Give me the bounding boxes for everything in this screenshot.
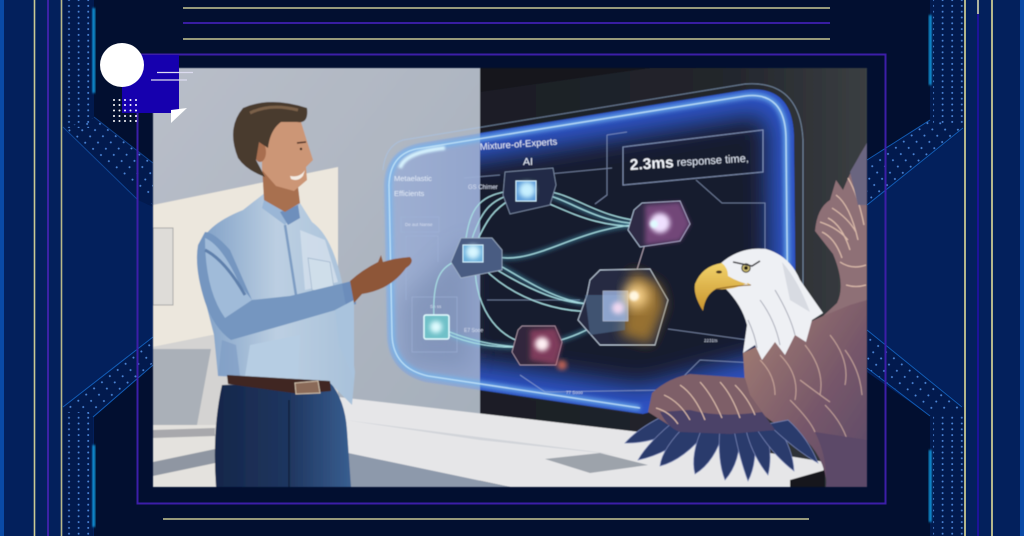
tablet [545,453,648,473]
white circle [100,43,144,87]
blue square [122,55,179,113]
wing coverts [648,373,761,426]
eye [733,261,760,272]
white triangle [171,108,187,123]
photo scene [153,68,868,487]
trousers [215,382,351,487]
label: response time: 2.3ms [629,154,674,174]
flow wires [434,190,650,347]
label: small notes [405,185,718,395]
label: small notes: 77 Sooo [566,390,583,395]
white neck and head [720,249,823,360]
beak [695,263,751,311]
label: response time: response time, [676,153,749,169]
man [197,102,412,487]
hand [350,255,412,303]
label: small notes: Sn ss [430,304,442,309]
label: small notes: 2231ts [704,338,718,343]
node: prism B [578,269,668,345]
lower wing [625,374,818,481]
label: mixture of experts: Mixture-of-Experts [479,137,558,153]
laptop [153,349,211,425]
label: small notes: De aut Nanse [405,222,433,227]
body [743,300,867,487]
face [262,112,313,191]
long feathers [625,412,818,481]
label: small notes: GS Chimer [468,185,498,191]
label: AI: AI [523,156,533,168]
room wall [153,68,867,487]
horizontal lines [163,8,830,519]
sleeve [197,232,356,340]
decorative badge [100,43,193,123]
node: top chip [503,168,556,214]
upper wing [815,143,868,316]
node: middle chip [451,238,502,278]
label: left heading: Metaelastic [394,174,432,183]
label: small notes: E7 Sooe [464,328,483,334]
leg [816,432,860,487]
label: left heading: Efficients [394,189,425,198]
holographic panel [383,84,803,414]
node: lower left chip [424,315,449,339]
belt [227,375,331,394]
neck [262,165,300,212]
label: left heading [394,175,432,196]
panel outline boxes [401,130,765,392]
white lines [151,72,193,80]
right dotted band [867,0,965,536]
node: prism A [628,201,690,247]
hair [233,102,307,177]
eagle [625,143,868,487]
left dotted band [63,0,153,536]
panel labels [394,137,749,395]
shirt [200,192,355,405]
label: response time [629,154,749,171]
purple frame [138,54,886,504]
table [153,397,825,487]
dot grid [113,99,137,122]
node: prism C [512,326,567,370]
